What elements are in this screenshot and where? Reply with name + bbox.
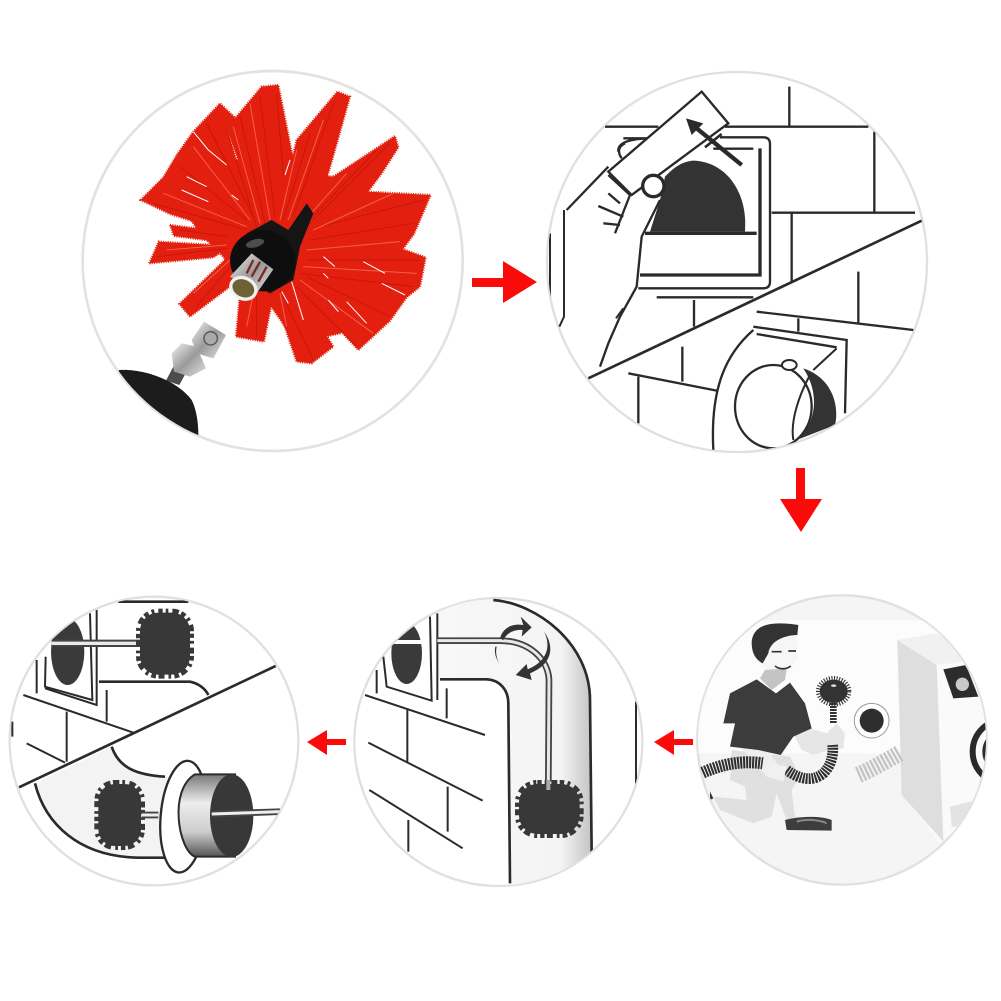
corrugated hose bbox=[703, 745, 833, 779]
window opening bbox=[51, 618, 84, 685]
lower pipe bbox=[35, 747, 172, 858]
arrow: to step 2 bbox=[472, 261, 537, 303]
diagonal divider bbox=[19, 666, 276, 787]
man face details bbox=[772, 651, 796, 669]
window opening bbox=[391, 626, 422, 684]
top rod bbox=[52, 632, 145, 654]
vent frame bbox=[618, 137, 770, 288]
panel: brush rotating up pipe bbox=[354, 598, 642, 887]
wall background bbox=[698, 620, 940, 754]
detached light hose bbox=[858, 753, 899, 775]
lower brush head bbox=[98, 784, 141, 846]
vent opening bbox=[650, 161, 745, 232]
top section line art bbox=[12, 602, 208, 763]
arrow: to step 3 bbox=[780, 468, 822, 532]
black brush spine bbox=[293, 175, 332, 217]
top brush head bbox=[140, 613, 190, 675]
dryer machine bbox=[897, 634, 986, 842]
hub flange bbox=[230, 234, 266, 292]
panel: red nylon brush on drill bbox=[83, 71, 463, 460]
man shirt bbox=[723, 679, 812, 755]
brush bristles bbox=[141, 85, 431, 363]
panel: remove vent cover bbox=[547, 72, 927, 452]
vent flange and duct bbox=[156, 759, 253, 874]
man legs bbox=[710, 750, 832, 831]
hand on hose bbox=[767, 764, 786, 782]
metal tube bbox=[229, 253, 274, 301]
lifted cover card bbox=[608, 92, 728, 195]
dark brush head bbox=[519, 780, 580, 834]
arrow: to step 4 bbox=[654, 730, 693, 755]
pipe walls bbox=[440, 600, 592, 883]
lower rod bbox=[142, 812, 280, 815]
diagonal divider bbox=[588, 221, 922, 378]
drill body bbox=[118, 370, 198, 435]
black core behind hub bbox=[246, 203, 314, 294]
panel: brush through pipe and final section bbox=[10, 597, 298, 885]
bristle texture bbox=[153, 93, 423, 360]
upward arrow bbox=[686, 118, 742, 165]
wall vent hole bbox=[854, 703, 889, 738]
lower vent with flap bbox=[713, 327, 847, 450]
hand-held brush bbox=[820, 680, 848, 723]
hand bbox=[550, 143, 664, 367]
panel: man with brush and dryer bbox=[697, 595, 1001, 885]
arrow: to step 5 bbox=[307, 730, 346, 755]
drill chuck bbox=[166, 322, 226, 385]
flexible rod bbox=[437, 641, 549, 782]
brick and window lines bbox=[365, 613, 636, 852]
brick lines bbox=[605, 87, 915, 423]
rotation arrows bbox=[495, 617, 550, 680]
man hair bbox=[752, 623, 798, 663]
man arm and face bbox=[742, 669, 845, 776]
pipe shading bbox=[437, 600, 592, 887]
